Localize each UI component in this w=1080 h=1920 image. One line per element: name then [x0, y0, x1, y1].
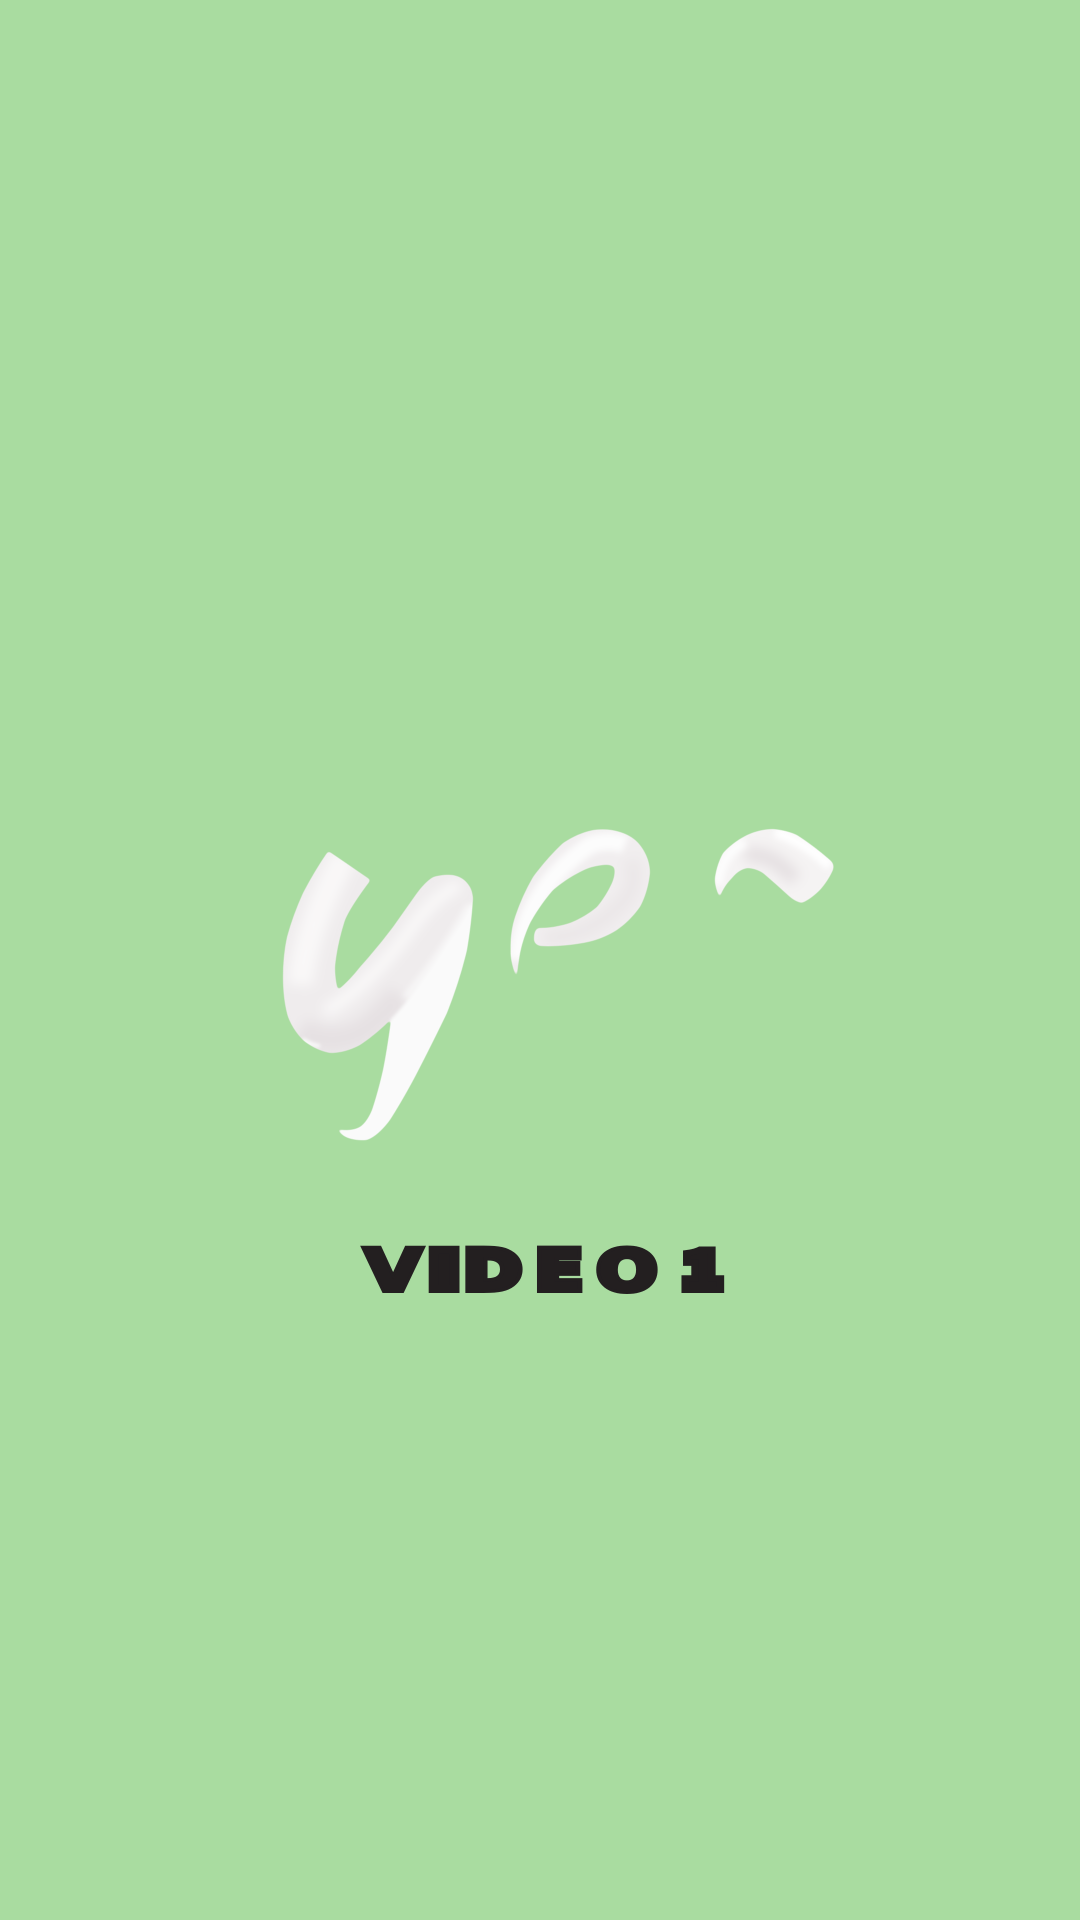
letter y: tail — [337, 897, 473, 1140]
letter e — [510, 829, 650, 974]
heading: VIDEO 1: D — [463, 1238, 522, 1303]
3D cream lettering — [270, 825, 840, 1140]
heading: VIDEO 1: E — [535, 1238, 583, 1303]
letter y: tube — [282, 852, 474, 1054]
heading: VIDEO 1: 1 — [684, 1231, 720, 1301]
heading: VIDEO 1: V — [364, 1237, 422, 1304]
heading: VIDEO 1: I — [434, 1245, 454, 1295]
letter r stroke — [714, 828, 834, 903]
heading: VIDEO 1: O — [596, 1239, 657, 1304]
poster canvas — [282, 828, 834, 1294]
